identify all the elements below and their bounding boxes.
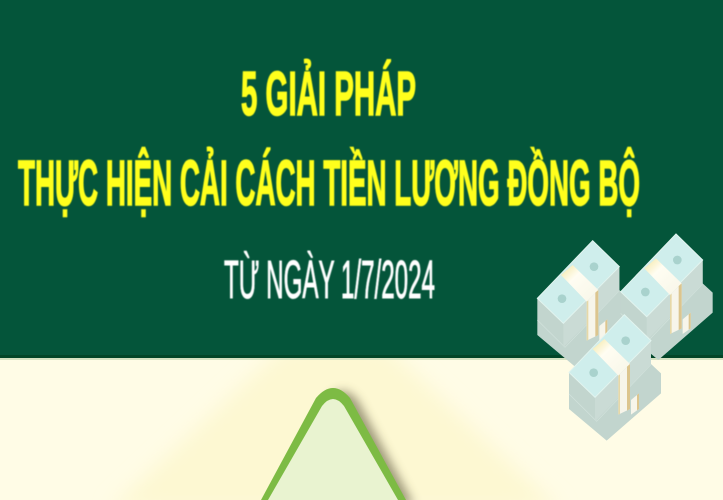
light beam behind triangle <box>123 360 547 500</box>
icon: money stacks <box>537 234 713 441</box>
title <box>18 60 640 310</box>
title: 5 GIẢI PHÁP <box>241 60 416 129</box>
icon: back right stack <box>621 234 713 360</box>
icon: front stack <box>569 315 661 441</box>
title: TỪ NGÀY 1/7/2024 <box>224 250 435 310</box>
icon: back left stack <box>537 241 629 367</box>
triangle panel <box>261 388 414 500</box>
header band <box>0 0 723 360</box>
